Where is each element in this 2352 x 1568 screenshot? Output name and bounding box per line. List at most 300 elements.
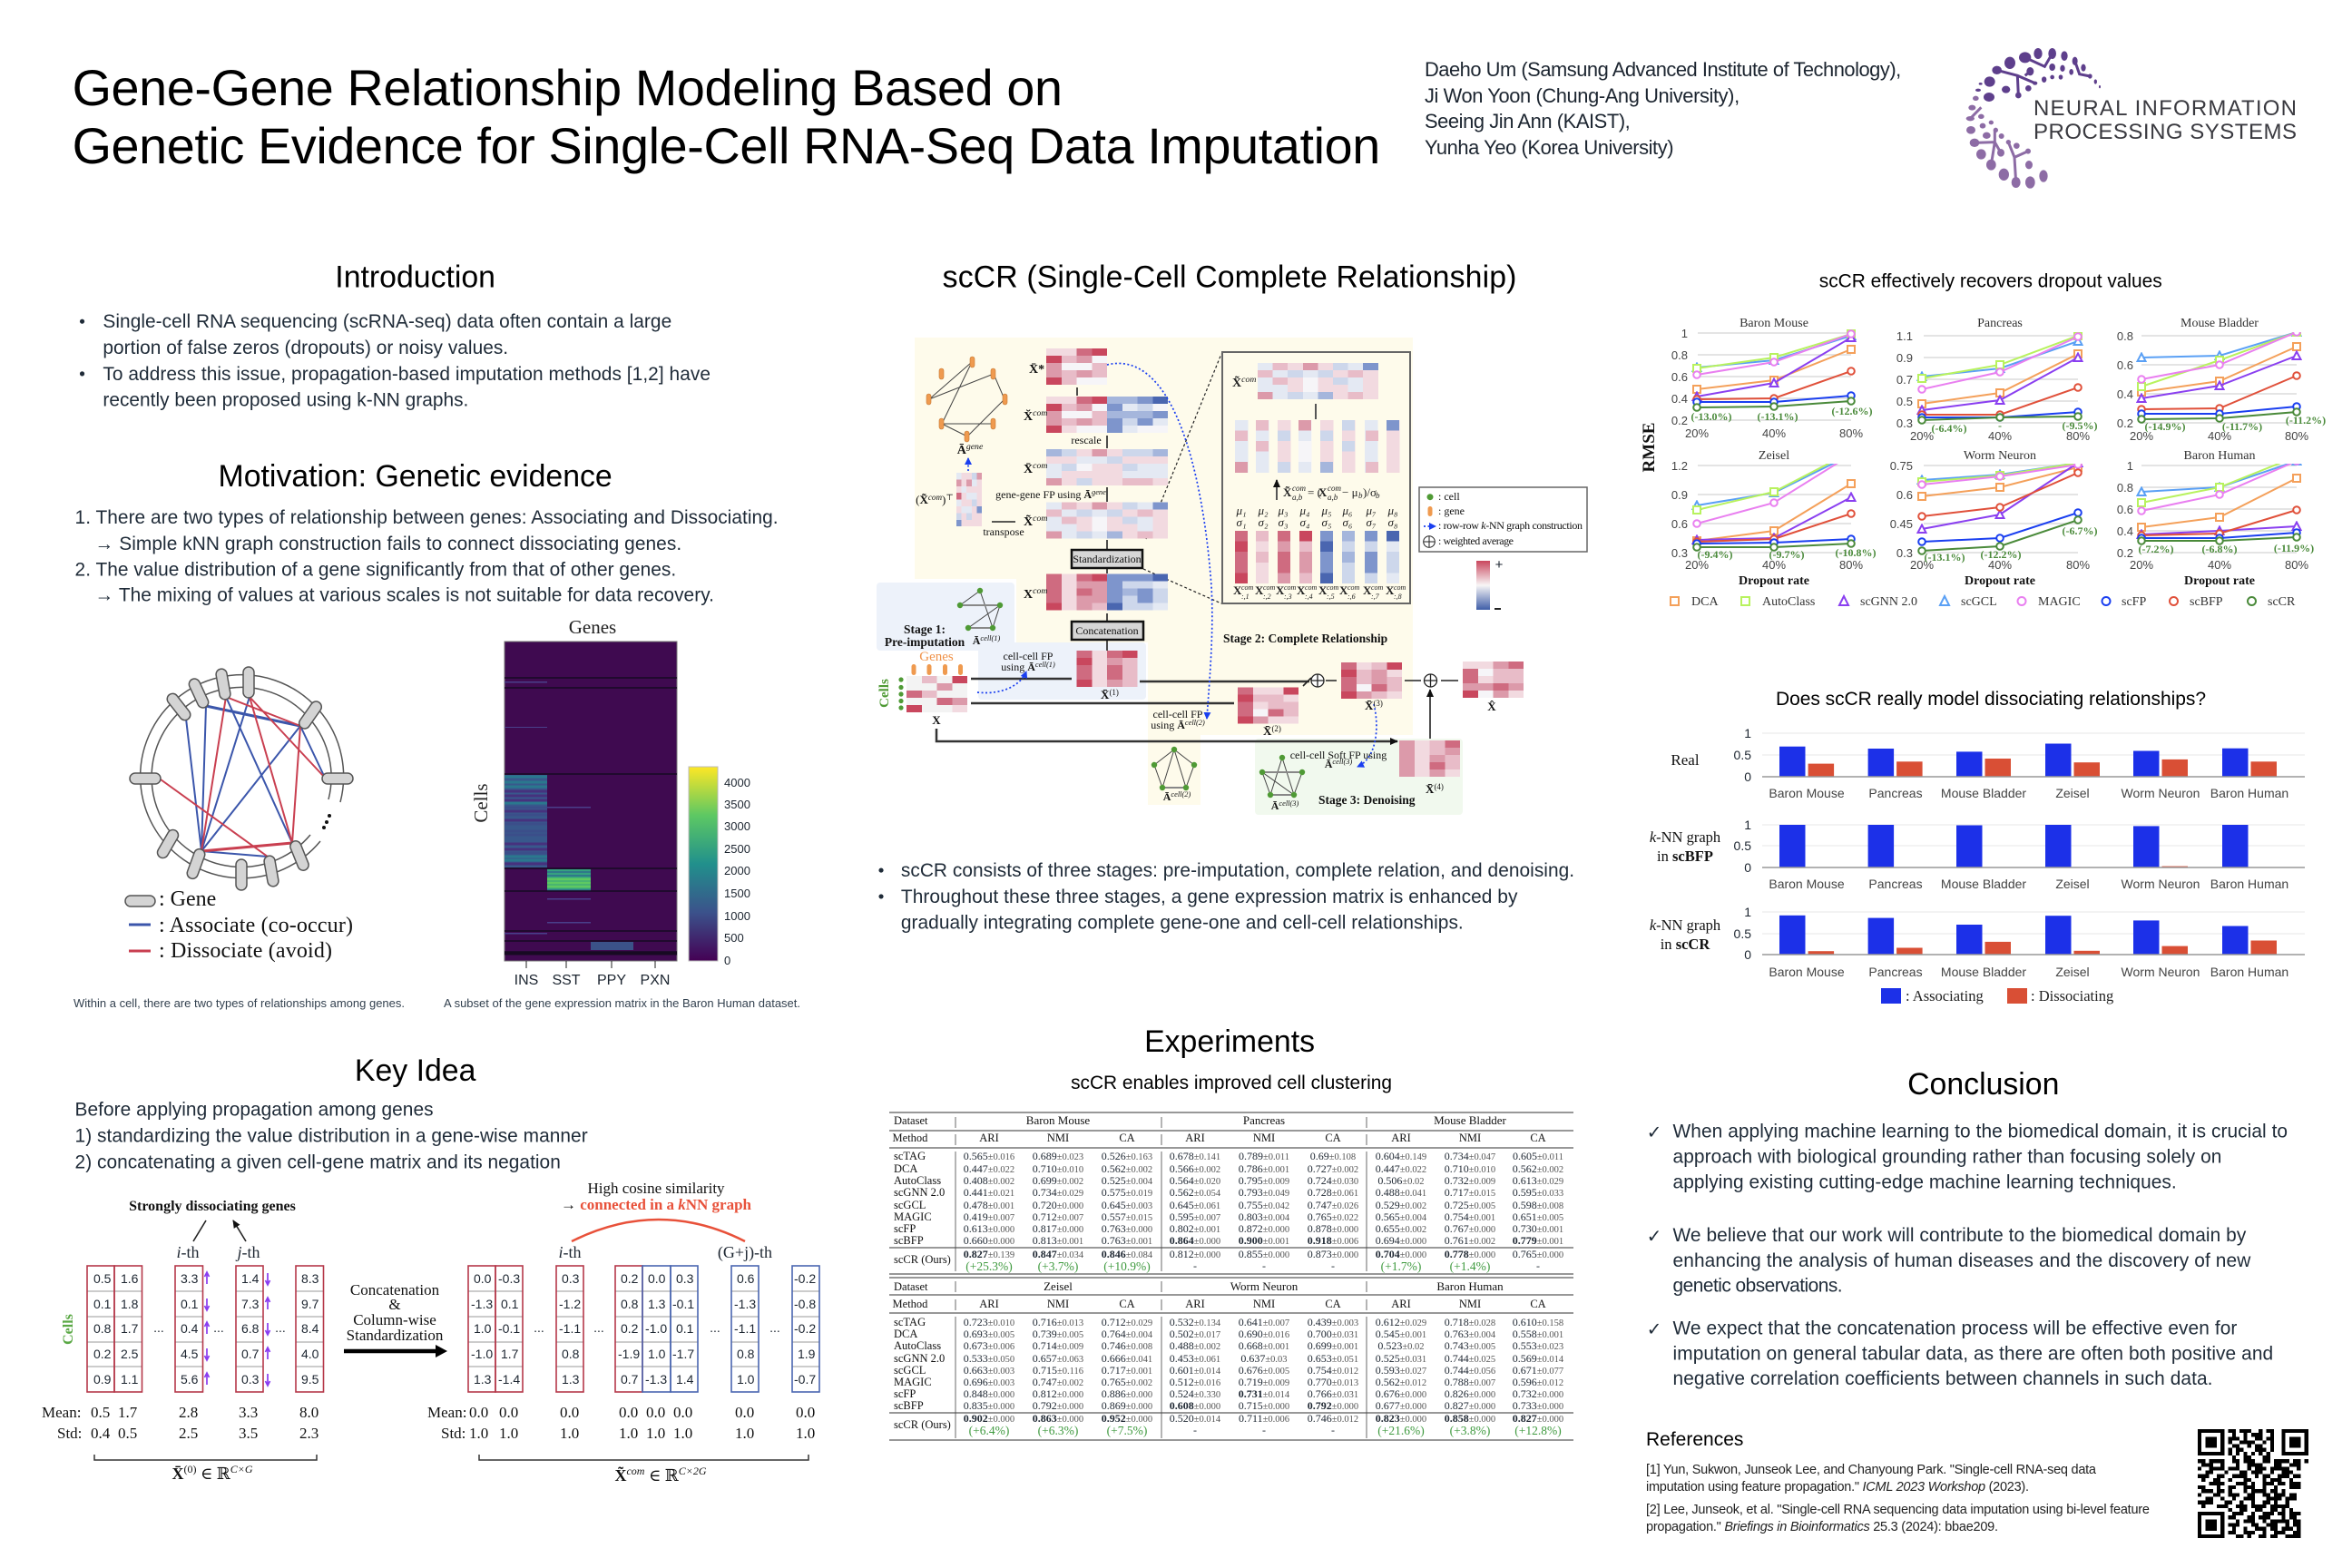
diagram: concatenation and standardization: 1.0	[469, 1425, 488, 1442]
labels: pipeline: X̃	[1024, 514, 1033, 529]
chart: RMSE line charts: (-7.2%)	[2138, 543, 2174, 555]
legend: pipeline: : cell	[1438, 490, 1460, 503]
table: clustering results: 0.747±0.026	[1308, 1199, 1358, 1211]
diagram: concatenation and standardization: 0.2	[621, 1271, 639, 1286]
diagram: concatenation and standardization: X̄	[172, 1465, 183, 1483]
table: clustering results: scGCL	[894, 1199, 926, 1211]
chart: RMSE line charts: Baron Human	[2184, 449, 2255, 463]
text block: pipeline bullets: scCR consists of three stages: pre-imputation, complete relation, and denoising.	[901, 860, 1574, 881]
legend: gene relationship	[125, 887, 353, 963]
chart: RMSE line charts: 20%	[1685, 426, 1709, 440]
diagram: concatenation and standardization: j-th	[235, 1243, 260, 1261]
chart: RMSE line charts: (-14.9%)	[2145, 420, 2185, 433]
diagram: concatenation and standardization: 0.0	[499, 1404, 518, 1421]
chart: RMSE line charts: 0.4	[2117, 387, 2133, 401]
diagram: concatenation and standardization: ...	[534, 1320, 544, 1335]
table: clustering results: NMI	[1253, 1298, 1275, 1310]
diagram: concatenation and standardization: ...	[275, 1320, 286, 1335]
inset: standardization detail: X	[1276, 583, 1285, 597]
diagram: concatenation and standardization: 0.1	[676, 1321, 694, 1336]
table: clustering results: 0.566±0.002	[1170, 1162, 1220, 1175]
chart: bar charts: 0	[1744, 947, 1751, 962]
heatmap: X com	[1046, 573, 1168, 610]
subheading: clustering: scCR enables improved cell clustering	[1071, 1073, 1392, 1093]
chart: Mouse Bladder lines	[2141, 332, 2297, 419]
authors: Yunha Yeo (Korea University)	[1425, 136, 1674, 159]
labels: pipeline: cell(2)	[1171, 790, 1191, 799]
table: clustering results: 0.605±0.011	[1513, 1150, 1563, 1162]
inset: standardization detail: com	[1327, 583, 1339, 592]
table: clustering results: 0.731±0.014	[1239, 1387, 1289, 1400]
chart: RMSE line charts	[1640, 317, 2326, 609]
diagram: concatenation and standardization: 0.0	[673, 1404, 692, 1421]
labels: pipeline: Pre-imputation	[885, 635, 965, 649]
diagram: concatenation and standardization: 0.0	[469, 1404, 488, 1421]
diagram: concatenation and standardization: i-th	[176, 1243, 200, 1261]
chart: bar charts: 1	[1744, 818, 1751, 832]
text block: key idea: 1) standardizing the value distribution in a gene-wise manner	[75, 1126, 588, 1147]
table: clustering results: 0.724±0.030	[1308, 1174, 1358, 1187]
chart: bar charts: in scBFP	[1657, 848, 1713, 865]
table: clustering results: 0.645±0.061	[1170, 1199, 1220, 1211]
table: clustering results: 0.792±0.000	[1033, 1399, 1083, 1412]
heatmap: transposed	[956, 473, 982, 526]
diagram: concatenation and standardization: -1.4	[498, 1372, 520, 1387]
references: [1] Yun, Sukwon, Junseok Lee, and Chanyoung Park. "Single-cell RNA-seq data	[1646, 1463, 2097, 1477]
heatmap: X-bar 3	[1341, 662, 1402, 699]
table: clustering results: 0.593±0.027	[1376, 1364, 1426, 1377]
table: clustering results: -	[1262, 1424, 1266, 1436]
inset: standardization detail: μ₇	[1365, 504, 1377, 517]
diagram: concatenation and standardization: -0.2	[794, 1321, 816, 1336]
diagram: concatenation and standardization: 2.5	[179, 1425, 198, 1442]
chart: RMSE line charts: Dropout rate	[2184, 574, 2255, 588]
chart: RMSE line charts: Dropout rate	[1965, 574, 2035, 588]
table: clustering results: 0.710±0.010	[1445, 1162, 1495, 1175]
diagram: concatenation and standardization: 1.0	[619, 1425, 638, 1442]
diagram: concatenation and standardization: 6.8	[241, 1321, 260, 1336]
table: clustering results: MAGIC	[894, 1210, 932, 1223]
formula: standardization: com	[1292, 484, 1306, 493]
table: clustering results: 0.408±0.002	[964, 1174, 1014, 1187]
text block: motivation list: 2. The value distribution of a gene significantly from that of other genes.	[75, 560, 676, 581]
labels: pipeline: using Ā	[1151, 719, 1185, 731]
table: clustering results: 0.673±0.006	[964, 1339, 1014, 1352]
diagram: concatenation and standardization: 1.3	[648, 1297, 666, 1311]
panel: dissociating relationships	[1650, 689, 2305, 1004]
legend: RMSE methods: scFP	[2122, 595, 2146, 609]
logo: NeurIPS: PROCESSING SYSTEMS	[2034, 120, 2297, 144]
diagram: concatenation and standardization: 1.0	[560, 1425, 579, 1442]
formula: standardization: b	[1358, 491, 1363, 500]
chart: bar charts: Baron Human	[2210, 877, 2288, 891]
table: clustering results: (+21.6%)	[1377, 1424, 1425, 1437]
heatmap: X-bar 2	[1238, 688, 1298, 724]
diagram: concatenation and standardization: 0.6	[737, 1271, 755, 1286]
diagram: concatenation and standardization: 0.9	[93, 1372, 112, 1387]
table: clustering results: 0.848±0.000	[964, 1387, 1014, 1400]
table: clustering results: 0.613±0.029	[1513, 1174, 1563, 1187]
panel: experiments	[889, 1024, 1573, 1440]
table: clustering results: -	[1262, 1259, 1266, 1272]
chart: RMSE line charts: (-13.0%)	[1691, 410, 1731, 423]
table: clustering results: 0.553±0.023	[1513, 1339, 1563, 1352]
authors: Daeho Um (Samsung Advanced Institute of Technology),	[1425, 58, 1901, 81]
table: clustering results: 0.700±0.031	[1308, 1328, 1358, 1340]
diagram: concatenation and standardization: 0.4	[181, 1321, 199, 1336]
table: clustering results: 0.699±0.002	[1033, 1174, 1083, 1187]
diagram: concatenation and standardization: 0.0	[648, 1271, 666, 1286]
table: clustering results: CA	[1325, 1132, 1341, 1144]
diagram: concatenation and standardization: 0.0	[560, 1404, 579, 1421]
diagram: concatenation and standardization: Standardization	[347, 1327, 444, 1344]
colorbar: pipeline scale	[1476, 557, 1504, 610]
legend: pipeline: : gene	[1438, 505, 1465, 517]
heatmap: X-check com	[1046, 397, 1168, 433]
diagram: concatenation and standardization: 0.0	[646, 1404, 665, 1421]
table: clustering results: 0.900±0.001	[1239, 1234, 1289, 1247]
diagram: concatenation and standardization: 0.4	[91, 1425, 111, 1442]
table: clustering results: 0.558±0.001	[1513, 1328, 1563, 1340]
table: clustering results: 0.918±0.006	[1308, 1234, 1358, 1247]
chart: RMSE line charts: 0.2	[1671, 414, 1688, 427]
chart: RMSE line charts: 20%	[2130, 429, 2153, 443]
inset: standardization detail: X	[1363, 583, 1372, 597]
legend: RMSE methods: scCR	[2268, 595, 2296, 609]
diagram: concatenation and standardization: 9.5	[301, 1372, 319, 1387]
diagram: concatenation and standardization: 1.6	[121, 1271, 139, 1286]
table: clustering results: 0.793±0.049	[1239, 1186, 1289, 1199]
inset: standardization detail: μ₈	[1387, 504, 1398, 517]
table: clustering results: CA	[1119, 1298, 1135, 1310]
formula: standardization: b	[1376, 491, 1380, 500]
chart: RMSE line charts: (-10.8%)	[1835, 546, 1877, 559]
diagram: concatenation and standardization: 0.8	[621, 1297, 639, 1311]
table: clustering results: Method	[893, 1132, 928, 1144]
table: clustering results: CA	[1530, 1132, 1546, 1144]
table: clustering results: 0.952±0.000	[1102, 1412, 1152, 1425]
heatmap: X input	[906, 676, 967, 712]
table: clustering results: 0.744±0.056	[1445, 1364, 1495, 1377]
diagram: concatenation and standardization: 1.7	[121, 1321, 139, 1336]
nodes: input genes and cells: Cells	[877, 679, 892, 708]
chart: RMSE line charts: 40%	[1762, 558, 1786, 572]
table: clustering results: 0.604±0.149	[1376, 1150, 1426, 1162]
panel: introduction	[80, 260, 710, 411]
table: clustering results: 0.747±0.002	[1033, 1376, 1083, 1388]
diagram: concatenation and standardization: 5.6	[181, 1372, 199, 1387]
chart: RMSE line charts: (-12.6%)	[1831, 405, 1873, 417]
text block: conclusion checklist: ✓	[1647, 1319, 1661, 1339]
labels: pipeline: X̆	[1024, 408, 1033, 424]
table: clustering results: NMI	[1047, 1298, 1069, 1310]
text block: conclusion checklist: enhancing the analysis of human diseases and the discovery of new	[1673, 1250, 2251, 1271]
title: Gene-Gene Relationship Modeling Based on	[73, 59, 1063, 116]
table: clustering results: AutoClass	[894, 1174, 941, 1187]
chart: gene expression heatmap: 3500	[724, 798, 750, 811]
diagram: concatenation and standardization: 0.5	[93, 1271, 112, 1286]
diagram: concatenation and standardization: 8.4	[301, 1321, 319, 1336]
references	[1646, 1429, 2150, 1534]
table: clustering results: scFP	[894, 1222, 916, 1235]
diagram: concatenation and standardization: ...	[769, 1320, 780, 1335]
references: imputation using feature propagation." ICML 2023 Workshop (2023).	[1646, 1480, 2029, 1494]
chart: gene expression heatmap: PXN	[641, 973, 670, 988]
inset: standardization detail: com	[1305, 583, 1318, 592]
diagram: concatenation and standardization: 8.0	[299, 1404, 318, 1421]
diagram: concatenation and standardization: 1.7	[118, 1404, 138, 1421]
table: clustering results: scGNN 2.0	[894, 1186, 945, 1199]
diagram: concatenation and standardization: ...	[593, 1320, 604, 1335]
formula: standardization: a,b	[1328, 493, 1338, 502]
table: clustering results: Dataset	[894, 1280, 928, 1293]
text block: motivation list: → The mixing of values at various scales is not suitable for data recovery.	[94, 585, 714, 606]
chart: gene expression heatmap: 3000	[724, 819, 750, 833]
chart: RMSE line charts: 20%	[1910, 429, 1934, 443]
table: clustering results: 0.827±0.000	[1513, 1412, 1563, 1425]
table: clustering results: 0.765±0.002	[1102, 1376, 1152, 1388]
icon: QR code	[2198, 1429, 2308, 1538]
table: clustering results: 0.812±0.000	[1170, 1248, 1220, 1260]
table: clustering results: 0.564±0.020	[1170, 1174, 1220, 1187]
table: clustering results: 0.506±0.02	[1377, 1174, 1425, 1187]
text block: pipeline bullets: Throughout these three stages, a gene expression matrix is enhanced by	[901, 887, 1518, 907]
table: clustering results: 0.763±0.004	[1445, 1328, 1495, 1340]
diagram: concatenation and standardization: 0.0	[796, 1404, 815, 1421]
table: clustering results: 0.712±0.029	[1102, 1316, 1152, 1328]
inset: standardization detail: σ₁	[1237, 515, 1246, 529]
table: clustering results: Zeisel	[1044, 1279, 1073, 1293]
table: clustering results: DCA	[894, 1328, 917, 1340]
legend: RMSE methods: scGNN 2.0	[1860, 595, 1917, 609]
table: clustering results: 0.764±0.004	[1102, 1328, 1152, 1340]
labels: pipeline: cell-cell FP	[1153, 708, 1203, 720]
formula: standardization: X̃	[1283, 485, 1292, 499]
labels: pipeline: X̄	[1365, 699, 1374, 712]
diagram: concatenation and standardization: 0.3	[562, 1271, 580, 1286]
labels: pipeline: Stage 1:	[904, 622, 946, 636]
diagram: concatenation and standardization: 1.0	[499, 1425, 518, 1442]
chart: RMSE line charts: -	[1998, 419, 2002, 432]
diagram: concatenation and standardization: 0.8	[93, 1321, 112, 1336]
diagram: concatenation and standardization: -1.9	[618, 1347, 640, 1361]
labels: pipeline: (X̃	[916, 493, 928, 506]
table: clustering results: ARI	[1391, 1298, 1411, 1310]
inset: standardization detail: σ₄	[1300, 515, 1310, 529]
table: clustering results: 0.717±0.015	[1445, 1186, 1495, 1199]
table: clustering results: 0.525±0.031	[1376, 1352, 1426, 1365]
chart: RMSE line charts: 80%	[1839, 558, 1863, 572]
text block: introduction bullets	[80, 311, 710, 411]
table: clustering results: 0.766±0.031	[1308, 1387, 1358, 1400]
chart: bar charts: 1	[1744, 905, 1751, 919]
table: clustering results: (+3.8%)	[1450, 1424, 1490, 1437]
table: clustering results: CA	[1530, 1298, 1546, 1310]
text block: conclusion checklist	[1647, 1122, 2288, 1389]
diagram: concatenation and standardization: 4.0	[301, 1347, 319, 1361]
table: clustering results: 0.512±0.016	[1170, 1376, 1220, 1388]
table: clustering results: (+1.7%)	[1381, 1259, 1421, 1273]
table: clustering results: 0.725±0.005	[1445, 1199, 1495, 1211]
table: clustering results: 0.902±0.000	[964, 1412, 1014, 1425]
chart: bar charts: 0.5	[1734, 748, 1751, 762]
formula: standardization: X	[1318, 485, 1328, 499]
table: clustering results: 0.792±0.000	[1308, 1399, 1358, 1412]
table: clustering results: (+3.7%)	[1038, 1259, 1078, 1273]
diagram: concatenation and standardization: -0.3	[498, 1271, 520, 1286]
heatmap: X-bar star	[1046, 348, 1107, 385]
table: clustering results: 0.710±0.010	[1033, 1162, 1083, 1175]
chart: RMSE line charts: Zeisel	[1759, 449, 1789, 463]
labels: pipeline: ⊤	[946, 493, 954, 502]
chart: RMSE line charts: (-11.7%)	[2222, 420, 2262, 433]
labels: pipeline: X	[1024, 588, 1033, 602]
inset: standardization detail: X	[1255, 583, 1264, 597]
formula: standardization: − μ	[1342, 485, 1358, 499]
chart: bar charts: Mouse Bladder	[1941, 786, 2026, 800]
chart: RMSE line charts: 20%	[2130, 558, 2153, 572]
table: clustering results: 0.765±0.022	[1308, 1210, 1358, 1223]
chart: gene expression heatmap: 1000	[724, 909, 750, 923]
table: clustering results: -	[1193, 1424, 1197, 1436]
inset: standardization detail	[1222, 352, 1410, 603]
references: propagation." Briefings in Bioinformatics 25.3 (2024): bbae209.	[1646, 1520, 1998, 1534]
chart: RMSE line charts: Pancreas	[1977, 317, 2023, 330]
chart: RMSE line charts: 1	[2127, 459, 2133, 473]
table: clustering results: 0.858±0.000	[1445, 1412, 1495, 1425]
labels: pipeline: Ā	[1163, 790, 1171, 803]
table: clustering results: scBFP	[894, 1399, 924, 1412]
heatmap: X-tilde com	[1046, 503, 1168, 539]
table: clustering results: -	[1536, 1259, 1540, 1272]
chart: bar charts: Baron Mouse	[1769, 877, 1845, 891]
inset: standardization detail: μ₆	[1341, 504, 1353, 517]
diagram: concatenation and standardization: &	[388, 1296, 401, 1313]
table: clustering results: 0.886±0.000	[1102, 1387, 1152, 1400]
inset: standardization detail: X	[1339, 583, 1348, 597]
legend: pipeline: : row-row k-NN graph construction	[1438, 519, 1583, 532]
diagram: concatenation and standardization: 7.3	[241, 1297, 260, 1311]
table: clustering results: 0.565±0.016	[964, 1150, 1014, 1162]
labels: pipeline: Ā	[973, 634, 981, 647]
legend: gene relationship: : Associate (co-occur)	[159, 914, 353, 937]
diagram: concatenation and standardization: -0.1	[672, 1297, 694, 1311]
chart: RMSE line charts: 0.3	[1671, 546, 1688, 560]
inset: standardization detail: X	[1233, 583, 1242, 597]
labels: pipeline: cell(1)	[980, 634, 1000, 642]
table: clustering results: 0.723±0.010	[964, 1316, 1014, 1328]
text block: introduction bullets: recently been proposed using k-NN graphs.	[103, 390, 468, 411]
labels: pipeline: gene	[1092, 488, 1106, 496]
chart: RMSE line charts: 20%	[1910, 558, 1934, 572]
labels: pipeline: com	[1033, 408, 1047, 418]
diagram: concatenation and standardization: 4.5	[181, 1347, 199, 1361]
table: clustering results: 0.873±0.000	[1308, 1248, 1358, 1260]
chart: RMSE line charts: 40%	[1988, 558, 2012, 572]
text block: key idea: Before applying propagation among genes	[75, 1100, 434, 1121]
table: clustering results: 0.676±0.005	[1239, 1364, 1289, 1377]
chart: bar charts: Baron Human	[2210, 965, 2288, 979]
table: clustering results: 0.694±0.000	[1376, 1234, 1426, 1247]
formula: standardization: )/σ	[1363, 485, 1377, 499]
panel: key idea	[42, 1054, 819, 1485]
text block: conclusion checklist: imputation on general tabular data, as there are often both positive and	[1673, 1343, 2273, 1364]
chart: bar charts: k-NN graph	[1650, 828, 1721, 846]
table: clustering results: 0.823±0.000	[1376, 1412, 1426, 1425]
chart: RMSE line charts: 0.3	[1896, 546, 1913, 560]
table: clustering results: 0.770±0.013	[1308, 1376, 1358, 1388]
table: clustering results: 0.562±0.002	[1102, 1162, 1152, 1175]
inset: standardization detail: σ₇	[1367, 515, 1377, 529]
chart: bar charts: Pancreas	[1868, 786, 1923, 800]
table: clustering results: 0.598±0.008	[1513, 1199, 1563, 1211]
chart: bar charts: Worm Neuron	[2122, 965, 2200, 979]
chart: Baron Human lines	[2141, 456, 2297, 541]
caption: gene relationships: Within a cell, there are two types of relationships among genes.	[74, 996, 405, 1010]
diagram: concatenation and standardization: 1.4	[676, 1372, 694, 1387]
chart: Pancreas lines	[1922, 336, 2078, 420]
diagram: concatenation and standardization: -1.2	[559, 1297, 581, 1311]
chart: RMSE line charts: 0.9	[1896, 351, 1913, 365]
heatmap: X-bar com	[1046, 449, 1168, 485]
diagram: concatenation and standardization: ∈ ℝ	[196, 1465, 231, 1483]
legend: RMSE methods: scBFP	[2190, 595, 2223, 609]
table: clustering results: Method	[893, 1298, 928, 1310]
chart: RMSE line charts: 0.6	[1671, 370, 1688, 384]
text block: conclusion checklist: ✓	[1647, 1123, 1661, 1143]
diagram: concatenation and standardization: 0.0	[619, 1404, 638, 1421]
table: clustering results: 0.612±0.029	[1376, 1316, 1426, 1328]
table: clustering results: 0.641±0.007	[1239, 1316, 1289, 1328]
diagram: concatenation and standardization: 1.1	[121, 1372, 139, 1387]
labels: pipeline: (1)	[1109, 688, 1119, 697]
chart: RMSE line charts: 0.8	[2117, 329, 2133, 343]
diagram: concatenation and standardization: ∈ ℝ	[644, 1466, 680, 1485]
title: Genetic Evidence for Single-Cell RNA-Seq Data Imputation	[73, 117, 1380, 174]
panel: dropout recovery	[1640, 270, 2326, 609]
chart: RMSE line charts: 40%	[1762, 426, 1786, 440]
chart: bar charts: k-NN graph	[1650, 916, 1721, 934]
diagram: concatenation and standardization: Std:	[441, 1425, 466, 1442]
diagram: concatenation and standardization: -1.0	[471, 1347, 493, 1361]
chart: RMSE line charts: 80%	[2066, 558, 2090, 572]
diagram: concatenation and standardization: → connected in a kNN graph	[561, 1196, 752, 1213]
table: clustering results: 0.419±0.007	[964, 1210, 1014, 1223]
diagram: concatenation and standardization: 1.0	[474, 1321, 492, 1336]
table: clustering results: Mouse Bladder	[1434, 1113, 1507, 1127]
diagram: concatenation and standardization: -1.7	[672, 1347, 694, 1361]
legend: RMSE methods: MAGIC	[2038, 595, 2081, 609]
table: clustering results: 0.601±0.014	[1170, 1364, 1220, 1377]
labels: pipeline: X̄	[1101, 688, 1110, 701]
diagram: concatenation and standardization: 2.5	[121, 1347, 139, 1361]
table: clustering results: 0.520±0.014	[1170, 1412, 1220, 1425]
table: clustering results: 0.846±0.084	[1102, 1248, 1152, 1260]
diagram: concatenation and standardization: 2.8	[179, 1404, 198, 1421]
inset: standardization detail: :,6	[1348, 593, 1356, 601]
diagram: concatenation and standardization: -0.7	[794, 1372, 816, 1387]
chart: RMSE line charts: 0.6	[1671, 517, 1688, 531]
panel: conclusion	[1646, 1067, 2308, 1538]
table: clustering results: (+25.3%)	[965, 1259, 1013, 1273]
diagram: concatenation and standardization: i-th	[558, 1243, 582, 1261]
table: clustering results: 0.827±0.000	[1445, 1399, 1495, 1412]
diagram: concatenation and standardization: -1.1	[559, 1321, 581, 1336]
chart: RMSE line charts: Mouse Bladder	[2180, 317, 2259, 330]
chart: RMSE line charts: 40%	[2208, 429, 2231, 443]
inset: standardization detail: μ₃	[1277, 504, 1289, 517]
table: clustering results: 0.532±0.134	[1170, 1316, 1220, 1328]
